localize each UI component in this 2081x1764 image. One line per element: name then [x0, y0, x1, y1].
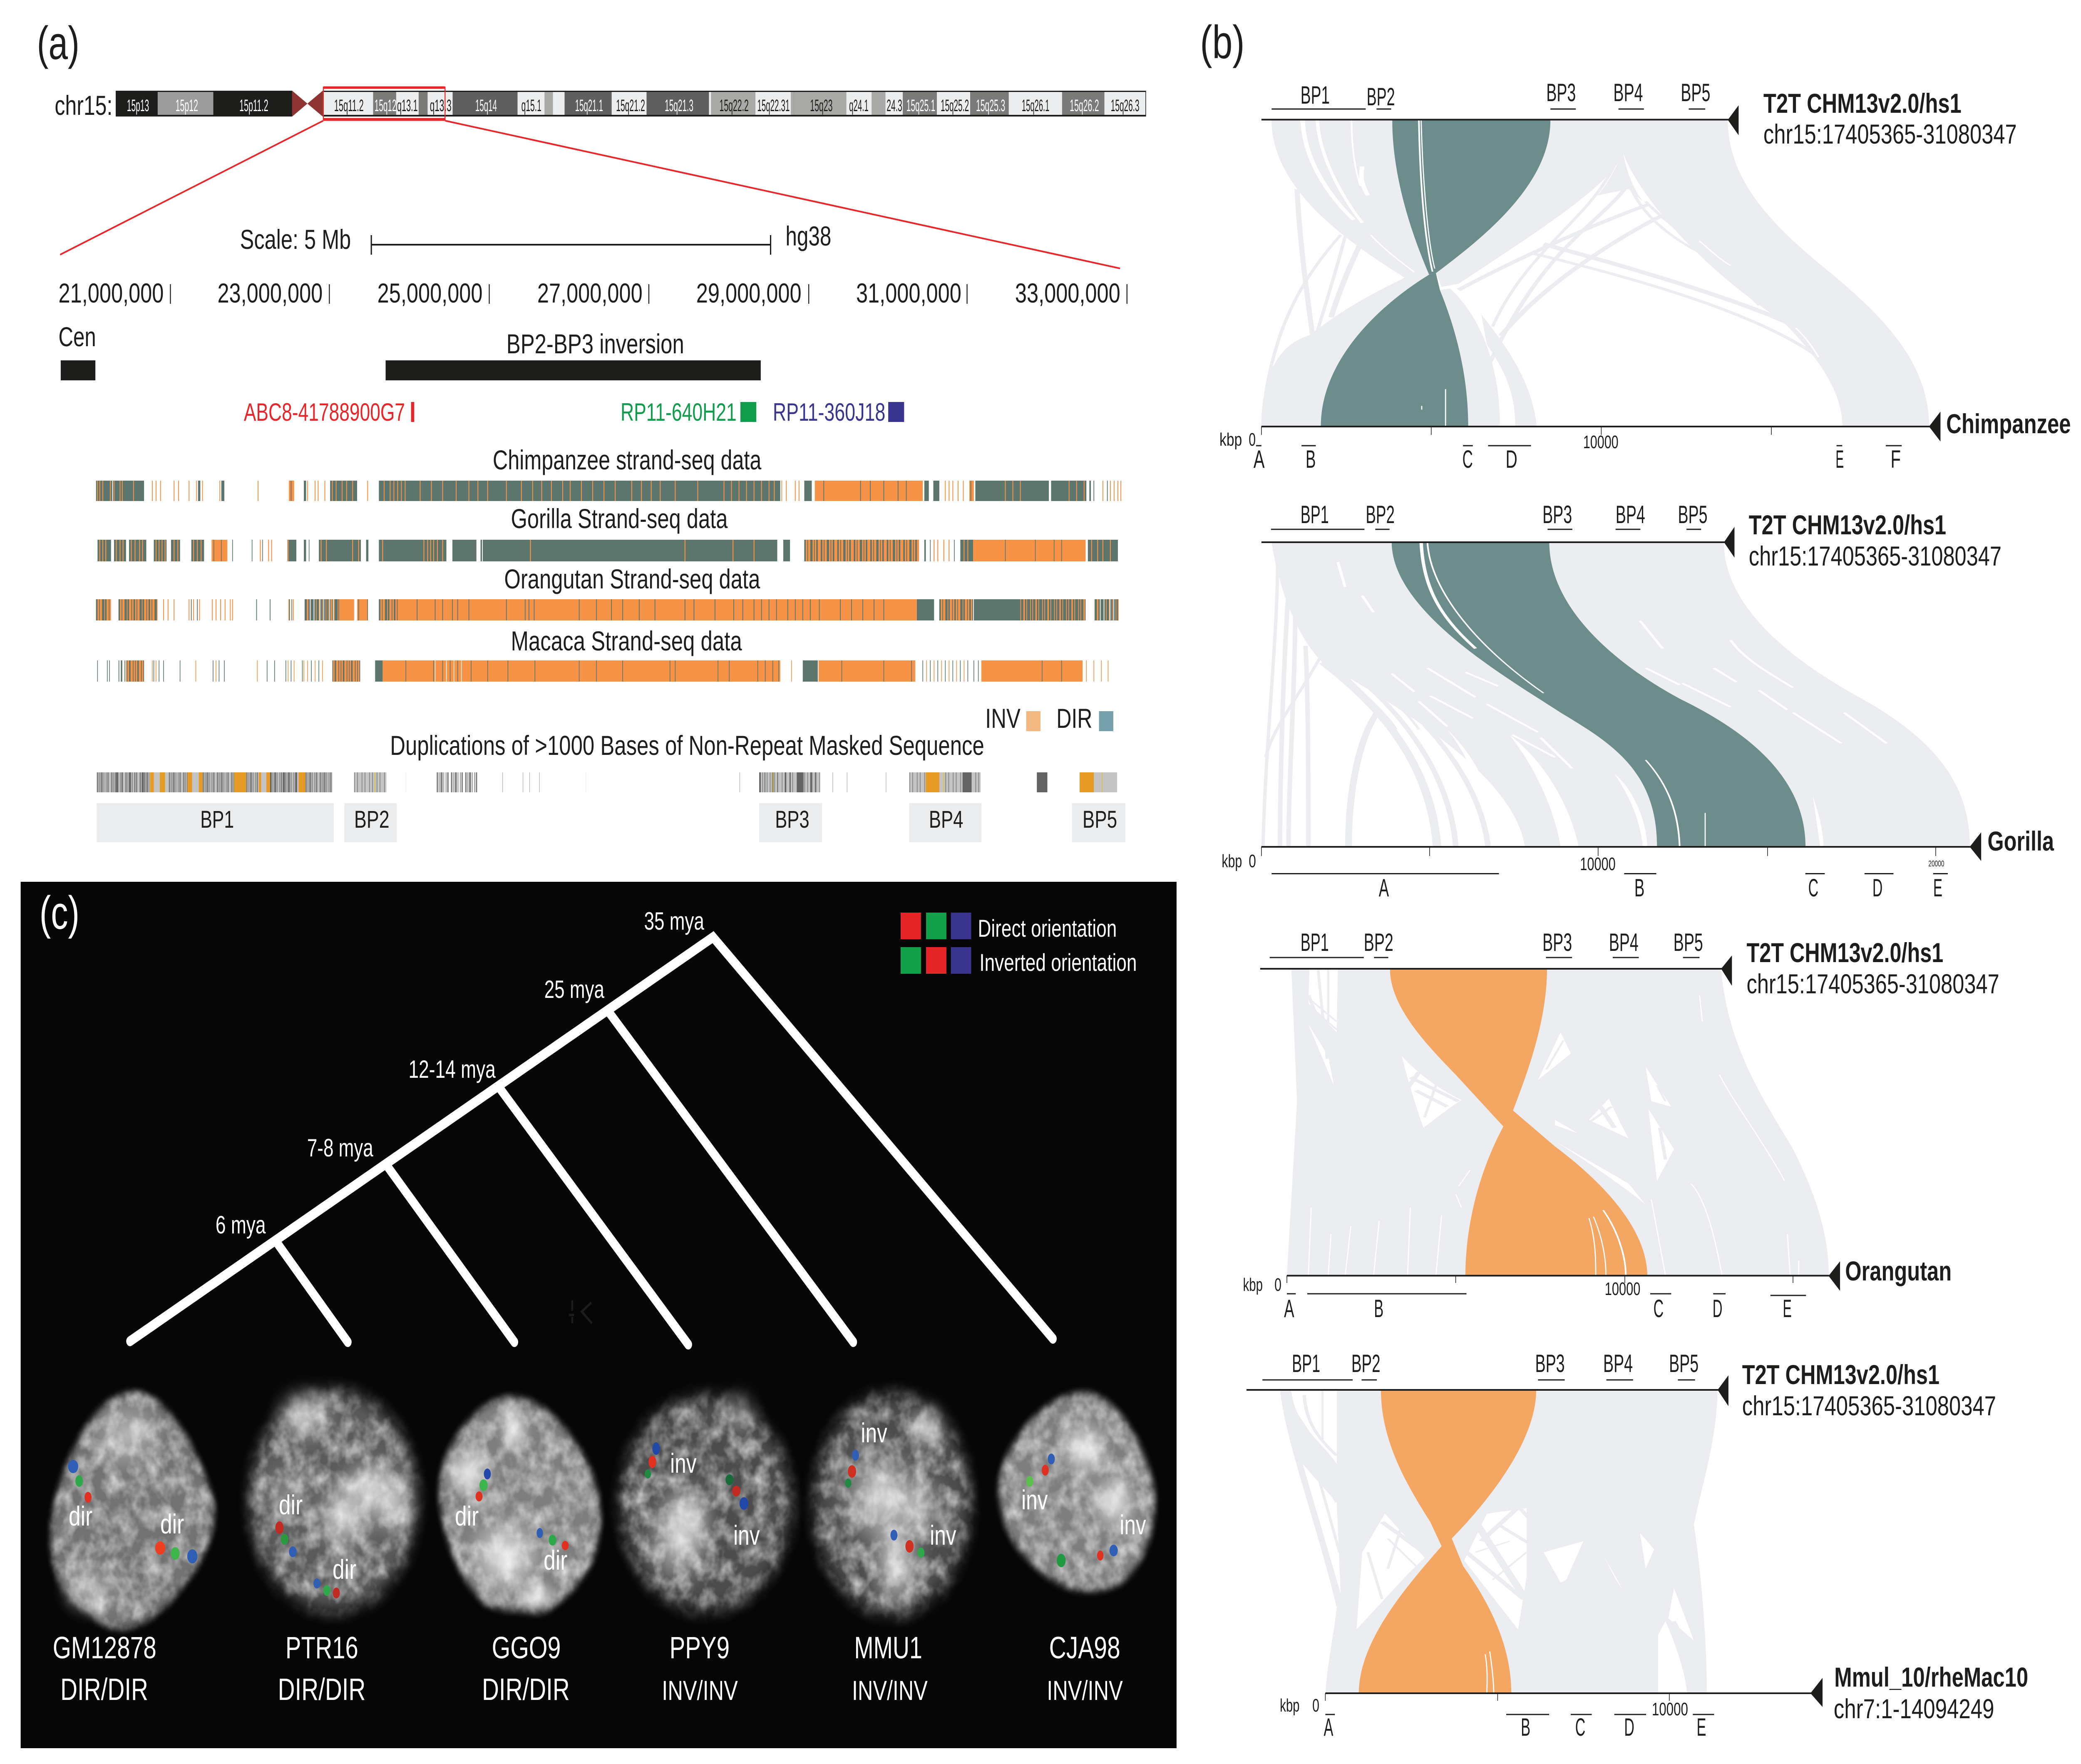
- chromosome ideogram: 15q14: [475, 96, 497, 115]
- genome coordinate ruler: 23,000,000: [217, 278, 323, 309]
- human reference axis: macaque plot: BP1: [1292, 1350, 1320, 1377]
- genome coordinate ruler: 33,000,000: [1015, 278, 1120, 309]
- assembly label: hg38: [785, 221, 831, 252]
- chimpanzee axis: A: [1254, 446, 1265, 473]
- human reference axis: macaque plot: [1247, 1350, 1728, 1406]
- chromosome ideogram: q13.1: [397, 96, 418, 115]
- gorilla axis: 0: [1249, 851, 1256, 871]
- genome coordinate ruler: 21,000,000: [59, 278, 164, 309]
- chromosome ideogram: q24.1: [849, 96, 869, 115]
- sample labels: INV/INV: [662, 1676, 738, 1706]
- chromosome label: chr15:: [55, 91, 112, 121]
- sample labels: GM12878: [53, 1630, 156, 1665]
- orientation legend: Inverted orientation: [979, 949, 1137, 976]
- synteny plot: gorilla: [1222, 501, 2054, 902]
- chromosome ideogram: 15q25.1: [906, 96, 935, 115]
- chromosome ideogram: 15q12: [375, 96, 396, 115]
- chromosome ideogram: 15q22.2: [720, 96, 749, 115]
- orangutan strand-seq track: [96, 599, 1119, 620]
- panel label (b): (b): [1200, 17, 1244, 69]
- chimpanzee axis: D: [1505, 446, 1517, 473]
- nucleus GM12878: dir: [69, 1501, 92, 1532]
- synteny plot: macaque: [1247, 1350, 2028, 1741]
- gorilla axis: B: [1634, 874, 1644, 902]
- chimpanzee axis: Chimpanzee: [1946, 409, 2071, 439]
- chromosome ideogram: 15q26.2: [1070, 96, 1099, 115]
- gorilla axis: D: [1872, 874, 1882, 902]
- human reference axis: gorilla plot: BP5: [1678, 501, 1708, 528]
- orangutan strand-seq label: Orangutan Strand-seq data: [504, 564, 760, 595]
- tree divergence labels: 25 mya: [544, 976, 604, 1003]
- macaque axis: 10000: [1652, 1699, 1688, 1719]
- chimpanzee axis: E: [1835, 446, 1844, 473]
- nucleus MMU1: inv: [861, 1418, 887, 1449]
- human reference axis: orangutan plot: BP2: [1364, 929, 1393, 956]
- chromosome ideogram: 15q25.3: [976, 96, 1005, 115]
- sample labels: INV/INV: [852, 1676, 928, 1706]
- human reference axis: gorilla plot: BP2: [1366, 501, 1395, 528]
- orangutan axis: 10000: [1605, 1279, 1640, 1299]
- human reference axis: gorilla plot: [1262, 501, 1734, 558]
- sample labels: GGO9: [492, 1630, 561, 1665]
- nucleus GM12878: dir: [160, 1509, 184, 1540]
- human reference axis: chimpanzee plot: BP5: [1681, 79, 1710, 107]
- human reference axis: gorilla plot: BP4: [1616, 501, 1645, 528]
- human reference axis: orangutan plot: BP4: [1609, 929, 1639, 956]
- reference title: orangutan plot: T2T CHM13v2.0/hs1: [1746, 938, 1943, 968]
- orangutan axis: E: [1783, 1295, 1792, 1322]
- chimpanzee axis: 0: [1249, 430, 1256, 450]
- reference title: macaque plot: chr15:17405365-31080347: [1742, 1391, 1996, 1422]
- tree divergence labels: 6 mya: [216, 1211, 266, 1239]
- macaque axis: D: [1624, 1714, 1634, 1741]
- breakpoint block BP3: BP3: [775, 806, 810, 833]
- macaque axis: A: [1324, 1714, 1334, 1741]
- genome coordinate ruler: 29,000,000: [696, 278, 802, 309]
- ribbons: chimpanzee: [1262, 120, 1929, 427]
- reference title: chimpanzee plot: chr15:17405365-31080347: [1763, 119, 2017, 150]
- panel label (c): (c): [40, 887, 79, 939]
- DIR legend: [1056, 704, 1113, 734]
- human reference axis: orangutan plot: [1260, 929, 1732, 986]
- BAC probe RP11-360J18: RP11-360J18: [773, 399, 885, 426]
- red selection box and zoom lines: [60, 87, 1120, 268]
- reference title: orangutan plot: chr15:17405365-31080347: [1746, 969, 1999, 1000]
- black panel background: [21, 882, 1177, 1748]
- breakpoint block BP4: [909, 803, 981, 842]
- gorilla axis: Gorilla: [1987, 826, 2054, 857]
- chromosome ideogram: 15p12: [176, 96, 198, 115]
- breakpoint block BP2: BP2: [354, 806, 390, 833]
- ribbons: orangutan: [1287, 969, 1829, 1276]
- orangutan axis: kbp: [1243, 1275, 1263, 1295]
- panel label (a): (a): [37, 17, 79, 69]
- macaque axis: chr7:1-14094249: [1834, 1694, 1994, 1724]
- reference title: macaque plot: T2T CHM13v2.0/hs1: [1742, 1360, 1939, 1390]
- panel: (a) chromosome 15 region: [37, 17, 1146, 842]
- panel: (c) phylogeny and FISH: [21, 882, 1177, 1748]
- genome coordinate ruler: 27,000,000: [537, 278, 643, 309]
- gorilla axis: 20000: [1928, 859, 1944, 868]
- tree divergence labels: [216, 908, 704, 1239]
- nucleus PPY9: [621, 1388, 791, 1610]
- chimpanzee axis: C: [1463, 446, 1473, 473]
- scale bar: [371, 235, 771, 255]
- genome coordinate ruler: 31,000,000: [856, 278, 961, 309]
- human reference axis: chimpanzee plot: BP1: [1301, 82, 1330, 109]
- synteny plot: orangutan: [1243, 929, 1999, 1322]
- chromosome ideogram: 15q22.31: [757, 96, 790, 115]
- human reference axis: macaque plot: BP4: [1603, 1350, 1633, 1377]
- duplications label: Duplications of >1000 Bases of Non-Repeat Masked Sequence: [390, 731, 984, 761]
- chimpanzee axis: [1219, 409, 2071, 473]
- nucleus MMU1: inv: [930, 1521, 956, 1551]
- gorilla strand-seq track: [97, 540, 1118, 561]
- macaque axis: kbp: [1280, 1696, 1300, 1716]
- gorilla axis: kbp: [1222, 851, 1242, 871]
- gorilla axis: A: [1379, 874, 1389, 902]
- orangutan axis: 0: [1274, 1275, 1281, 1295]
- centromere track: Cen: [59, 322, 96, 352]
- reference title: orangutan plot: [1746, 938, 1999, 1000]
- panel: (b) synteny ribbon plots: [1200, 17, 2071, 1741]
- genome coordinate ruler: 25,000,000: [377, 278, 482, 309]
- orientation legend: [901, 913, 1137, 976]
- sample labels: PPY9: [670, 1630, 730, 1665]
- human reference axis: orangutan plot: BP5: [1674, 929, 1703, 956]
- human reference axis: macaque plot: BP5: [1669, 1350, 1699, 1377]
- sample labels: DIR/DIR: [278, 1672, 365, 1707]
- nucleus CJA98: inv: [1120, 1510, 1146, 1541]
- chromosome ideogram: 15q23: [810, 96, 832, 115]
- chromosome ideogram: [116, 91, 1146, 117]
- nucleus GGO9: [440, 1397, 600, 1615]
- nucleus PPY9: inv: [670, 1449, 697, 1479]
- macaque axis: C: [1575, 1714, 1585, 1741]
- genome coordinate ruler: [59, 278, 1127, 309]
- macaque axis: 0: [1312, 1696, 1319, 1716]
- chromosome ideogram: 15p11.2: [239, 96, 268, 115]
- BP2-BP3 inversion track: [386, 329, 761, 380]
- gorilla axis: [1222, 826, 2054, 902]
- nucleus GGO9: dir: [544, 1546, 567, 1576]
- BAC probe ABC8: ABC8-41788900G7: [244, 399, 405, 426]
- orangutan axis: D: [1713, 1295, 1722, 1322]
- reference title: gorilla plot: chr15:17405365-31080347: [1749, 541, 2002, 572]
- ribbons: gorilla: [1263, 542, 1970, 847]
- sample labels: MMU1: [854, 1630, 922, 1665]
- breakpoint block BP1: BP1: [200, 806, 234, 833]
- sample labels: CJA98: [1049, 1630, 1120, 1665]
- human reference axis: orangutan plot: BP1: [1301, 929, 1329, 956]
- macaque axis: B: [1521, 1714, 1530, 1741]
- breakpoint block BP1: [97, 803, 334, 842]
- human reference axis: gorilla plot: BP3: [1542, 501, 1572, 528]
- human reference axis: chimpanzee plot: BP3: [1546, 79, 1576, 107]
- chimpanzee axis: B: [1306, 446, 1316, 473]
- breakpoint block BP2: [344, 803, 397, 842]
- gorilla axis: 10000: [1580, 854, 1616, 874]
- macaque axis: [1280, 1662, 2028, 1741]
- BP2-BP3 inversion track: BP2-BP3 inversion: [507, 329, 684, 360]
- chimpanzee strand-seq track: [96, 481, 1121, 501]
- nucleus CJA98: [999, 1393, 1155, 1590]
- macaque axis: Mmul_10/rheMac10: [1834, 1662, 2028, 1693]
- sample labels: DIR/DIR: [60, 1672, 148, 1707]
- chromosome ideogram: q15.1: [521, 96, 541, 115]
- gorilla axis: E: [1933, 874, 1942, 902]
- chromosome ideogram: 15q11.2: [334, 96, 364, 115]
- human reference axis: chimpanzee plot: [1262, 79, 1738, 135]
- orangutan axis: C: [1654, 1295, 1664, 1322]
- reference title: gorilla plot: [1749, 510, 2002, 572]
- reference title: chimpanzee plot: T2T CHM13v2.0/hs1: [1763, 89, 1962, 119]
- chimpanzee axis: 10000: [1583, 432, 1619, 452]
- nucleus CJA98: inv: [1021, 1485, 1048, 1516]
- chromosome ideogram: 15q26.3: [1111, 96, 1140, 115]
- phylogenetic tree: [130, 937, 1053, 1345]
- sample labels: INV/INV: [1047, 1676, 1123, 1706]
- gorilla axis: C: [1808, 874, 1818, 902]
- sample labels: DIR/DIR: [482, 1672, 570, 1707]
- human reference axis: chimpanzee plot: BP4: [1613, 79, 1643, 107]
- chromosome ideogram: 15q21.2: [616, 96, 645, 115]
- breakpoint block BP3: [759, 803, 822, 842]
- chromosome ideogram: 24.3: [887, 96, 902, 115]
- nucleus GGO9: dir: [455, 1501, 479, 1532]
- human reference axis: chimpanzee plot: BP2: [1367, 83, 1395, 111]
- segmental duplications track: [97, 772, 1117, 792]
- reference title: macaque plot: [1742, 1360, 1996, 1422]
- sample labels: PTR16: [286, 1630, 358, 1665]
- chromosome ideogram: q13.3: [430, 96, 452, 115]
- centromere track: [59, 322, 96, 380]
- tree divergence labels: 12-14 mya: [409, 1056, 496, 1083]
- macaca strand-seq label: Macaca Strand-seq data: [511, 626, 742, 657]
- chromosome ideogram: 15q26.1: [1022, 96, 1049, 115]
- tree divergence labels: 35 mya: [644, 908, 704, 935]
- DIR legend: DIR: [1056, 704, 1093, 734]
- breakpoint block BP5: [1072, 803, 1125, 842]
- chimpanzee axis: F: [1890, 446, 1901, 473]
- orangutan axis: A: [1284, 1295, 1294, 1322]
- orientation legend: Direct orientation: [978, 915, 1117, 942]
- nucleus MMU1: [814, 1395, 970, 1617]
- human reference axis: macaque plot: BP2: [1351, 1350, 1381, 1377]
- scale label: Scale: 5 Mb: [240, 225, 351, 255]
- tree divergence labels: 7-8 mya: [307, 1134, 373, 1162]
- INV legend: INV: [985, 704, 1021, 734]
- chromosome ideogram: 15q25.2: [941, 96, 969, 115]
- INV legend: [985, 704, 1040, 734]
- chromosome ideogram: 15p13: [127, 96, 149, 115]
- orangutan axis: B: [1374, 1295, 1383, 1322]
- nucleus PTR16: dir: [333, 1555, 356, 1585]
- orangutan axis: [1243, 1256, 1952, 1322]
- synteny plot: chimpanzee: [1219, 79, 2071, 473]
- human reference axis: gorilla plot: BP1: [1301, 501, 1329, 528]
- macaque axis: E: [1697, 1714, 1706, 1741]
- nucleus GM12878: [50, 1392, 214, 1629]
- orangutan axis: Orangutan: [1845, 1256, 1952, 1287]
- chimpanzee axis: kbp: [1219, 430, 1242, 450]
- gorilla strand-seq label: Gorilla Strand-seq data: [511, 504, 728, 534]
- reference title: gorilla plot: T2T CHM13v2.0/hs1: [1749, 510, 1946, 541]
- breakpoint block BP5: BP5: [1083, 806, 1117, 833]
- nucleus PTR16: dir: [279, 1490, 303, 1521]
- reference title: chimpanzee plot: [1763, 89, 2017, 150]
- ribbons: macaque: [1280, 1390, 1718, 1693]
- macaca strand-seq track: [97, 660, 1108, 682]
- human reference axis: macaque plot: BP3: [1535, 1350, 1565, 1377]
- sample labels: [53, 1630, 1123, 1707]
- nucleus PPY9: inv: [733, 1521, 760, 1551]
- chromosome ideogram: 15q21.1: [575, 96, 603, 115]
- chimpanzee strand-seq label: Chimpanzee strand-seq data: [493, 445, 762, 476]
- nucleus PTR16: [250, 1386, 420, 1610]
- human reference axis: orangutan plot: BP3: [1542, 929, 1572, 956]
- BAC probe RP11-640H21: RP11-640H21: [621, 399, 737, 426]
- breakpoint block BP4: BP4: [929, 806, 963, 833]
- chromosome ideogram: 15q21.3: [665, 96, 693, 115]
